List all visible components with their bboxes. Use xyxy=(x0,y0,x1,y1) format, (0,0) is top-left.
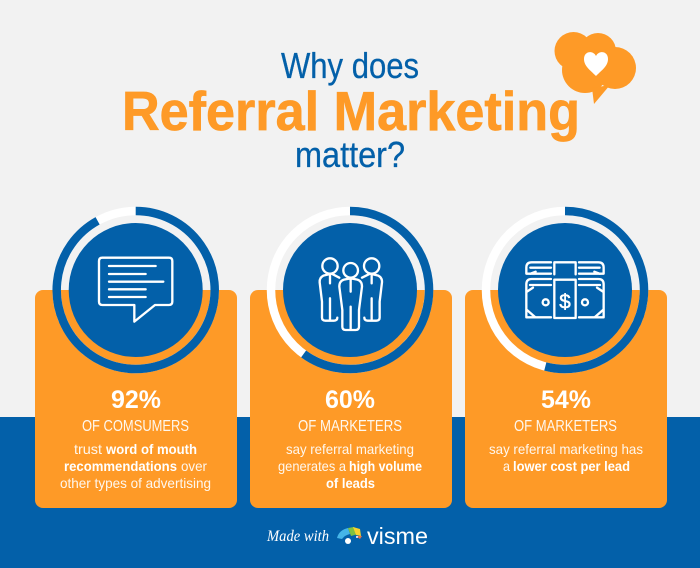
disc xyxy=(498,223,632,357)
disc xyxy=(69,223,203,357)
ring: 92 percent xyxy=(57,211,215,369)
stat: 92%: 92% xyxy=(111,386,161,414)
footer credit: made with visme: visme xyxy=(367,523,428,549)
description: of leads xyxy=(326,475,375,491)
description: recommendations xyxy=(64,458,177,474)
description: a xyxy=(503,458,510,474)
description: trust xyxy=(74,441,102,457)
description xyxy=(60,441,211,491)
blue footer band xyxy=(0,417,700,568)
description xyxy=(489,441,643,474)
description: over xyxy=(181,458,207,474)
icon: three people xyxy=(320,258,382,330)
stat: 60%: 60% xyxy=(325,386,375,414)
footer credit: made with visme xyxy=(266,523,428,549)
title: matter? xyxy=(295,134,405,175)
title xyxy=(122,45,580,175)
panel: marketers volume card xyxy=(250,211,452,508)
ring: 60 percent xyxy=(271,211,429,369)
icon: heart speech cloud xyxy=(554,32,636,104)
label: of consumers: OF COMSUMERS xyxy=(82,418,189,435)
icon: stack of money: $ xyxy=(559,291,571,314)
footer credit: made with visme: Made with xyxy=(266,528,329,545)
label: of marketers: OF MARKETERS xyxy=(298,418,402,435)
description: say referral marketing has xyxy=(489,441,643,457)
icon: stack of money xyxy=(526,262,604,318)
description: lower cost per lead xyxy=(513,458,630,474)
description: say referral marketing xyxy=(286,441,414,457)
panel: marketers cost card xyxy=(465,211,667,508)
icon: visme logo xyxy=(337,527,362,544)
label: of marketers: OF MARKETERS xyxy=(514,418,617,435)
description: other types of advertising xyxy=(60,475,211,491)
description: high volume xyxy=(349,458,422,474)
title: Referral Marketing xyxy=(122,80,580,142)
icon: speech bubble with text xyxy=(99,258,172,322)
title: Why does xyxy=(281,45,419,86)
ring: 54 percent xyxy=(486,211,644,369)
panel: consumers card xyxy=(35,211,237,508)
stat: 54%: 54% xyxy=(541,386,591,414)
description: word of mouth xyxy=(105,441,197,457)
description: generates a xyxy=(278,458,346,474)
disc xyxy=(283,223,417,357)
description xyxy=(278,441,422,491)
